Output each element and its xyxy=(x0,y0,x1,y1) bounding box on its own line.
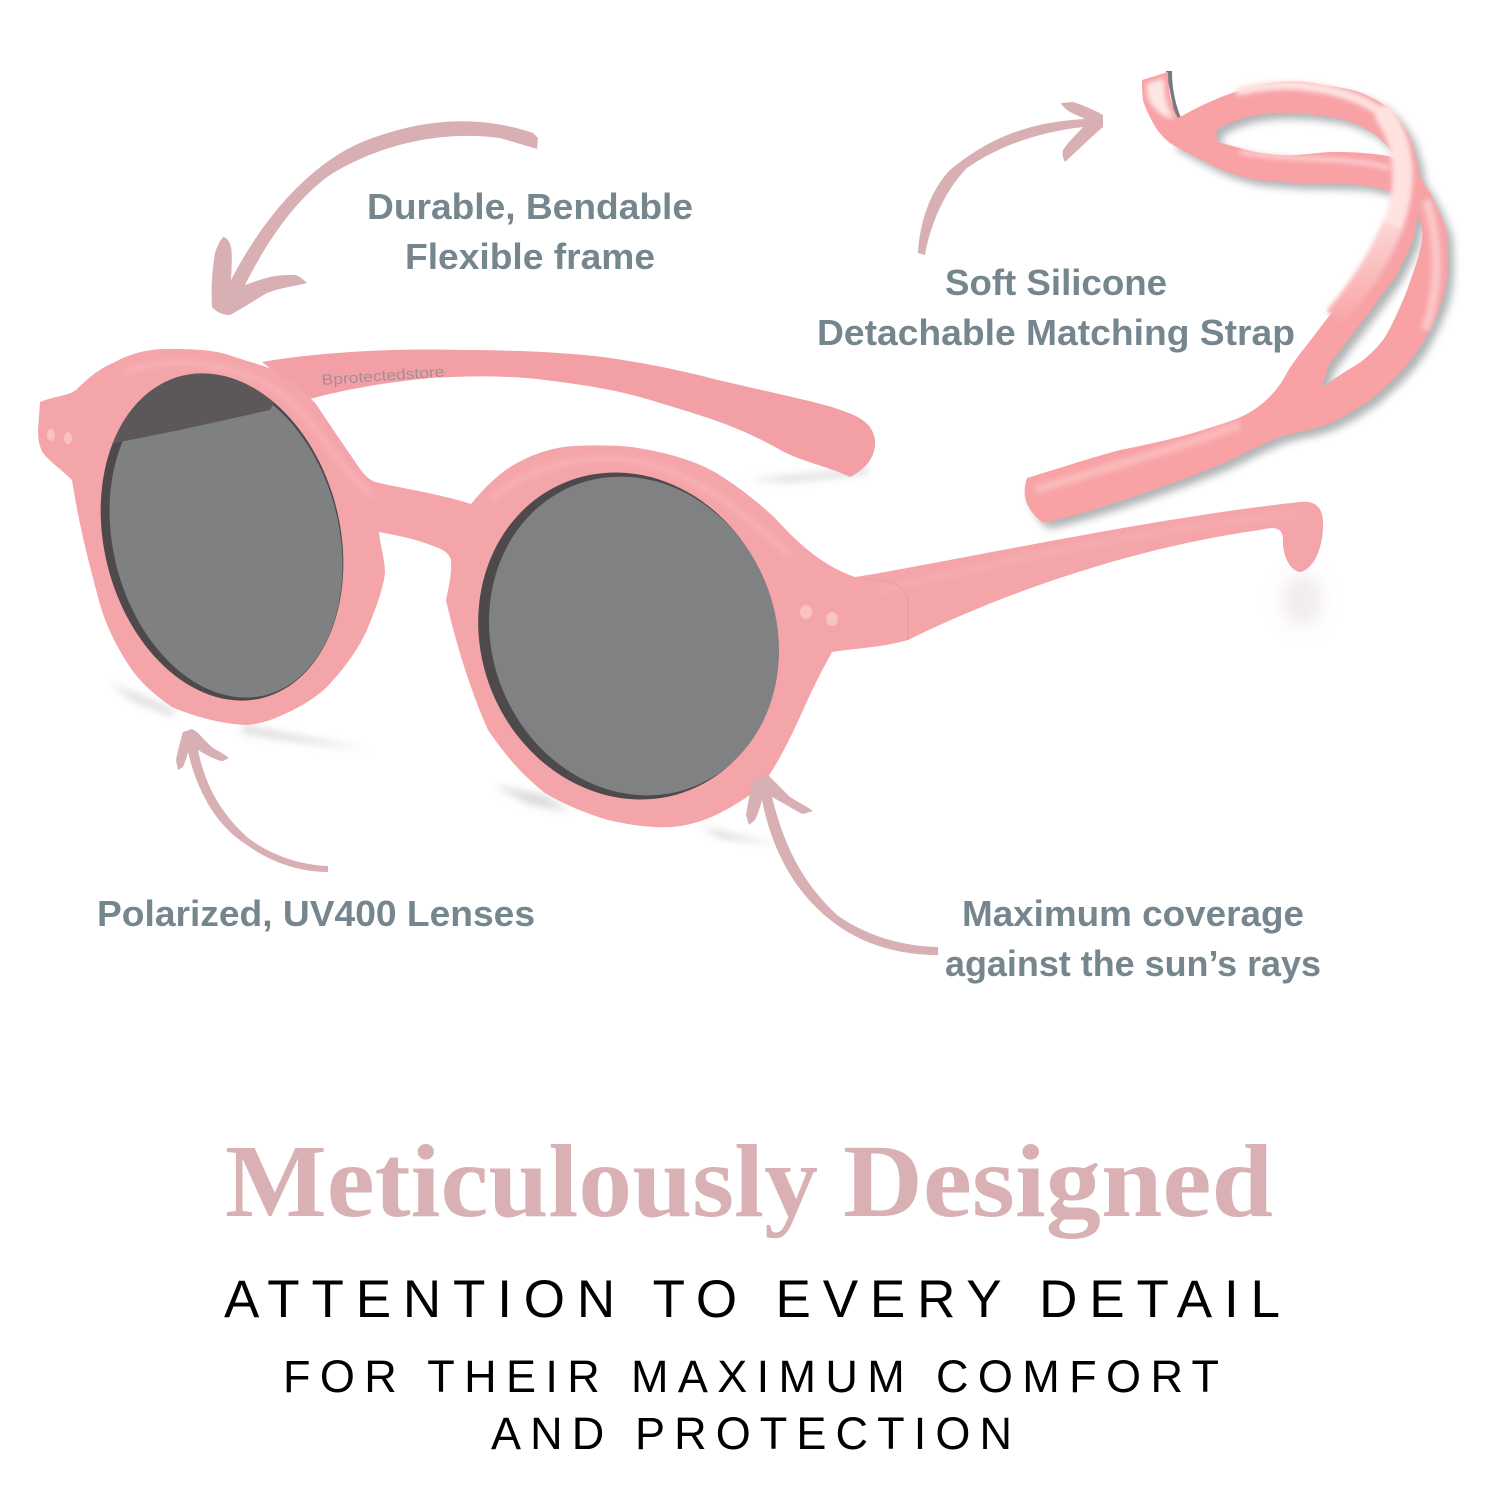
stub end xyxy=(1166,71,1181,122)
label: silicone strap: Detachable Matching Strap xyxy=(817,312,1295,353)
label: maximum coverage: Maximum coverage xyxy=(962,893,1304,934)
strap shadow xyxy=(1031,88,1454,529)
strap highlights xyxy=(1035,78,1436,490)
product: silicone strap xyxy=(1025,71,1454,529)
hinge rivets xyxy=(47,429,838,626)
tagline: AND PROTECTION xyxy=(491,1408,1012,1459)
arrow: durable frame xyxy=(212,121,538,315)
strap body xyxy=(1025,72,1448,523)
arrow: strap xyxy=(918,102,1103,255)
ground shadows xyxy=(108,468,868,845)
back temple arm xyxy=(262,350,875,477)
title xyxy=(225,1124,1273,1239)
left lens xyxy=(100,373,344,701)
subtitle: ATTENTION TO EVERY DETAIL xyxy=(224,1270,1280,1329)
frame xyxy=(38,349,1323,827)
label: maximum coverage xyxy=(945,893,1321,984)
label: maximum coverage: against the sun’s rays xyxy=(945,943,1321,984)
tagline xyxy=(283,1351,1219,1459)
title: Meticulously xyxy=(225,1124,818,1239)
label: polarized lenses: Polarized, UV400 Lenses xyxy=(97,893,535,934)
arrow: polarized lenses xyxy=(176,729,328,872)
label: durable frame: Durable, Bendable xyxy=(367,186,693,227)
label: durable frame: Flexible frame xyxy=(405,236,655,277)
right lens xyxy=(430,427,826,845)
arrow: maximum coverage xyxy=(746,775,938,955)
frame highlight xyxy=(125,363,790,555)
label: durable frame xyxy=(367,186,693,277)
engraved text: Bprotectedstore: Bprotectedstore xyxy=(321,363,445,389)
product: sunglasses xyxy=(38,347,1323,845)
hinge seam xyxy=(866,579,908,640)
title: Designed xyxy=(843,1124,1273,1239)
label: silicone strap xyxy=(817,262,1295,353)
label: silicone strap: Soft Silicone xyxy=(945,262,1167,303)
temple tip reflection xyxy=(1282,574,1322,626)
tagline: FOR THEIR MAXIMUM COMFORT xyxy=(283,1351,1219,1402)
